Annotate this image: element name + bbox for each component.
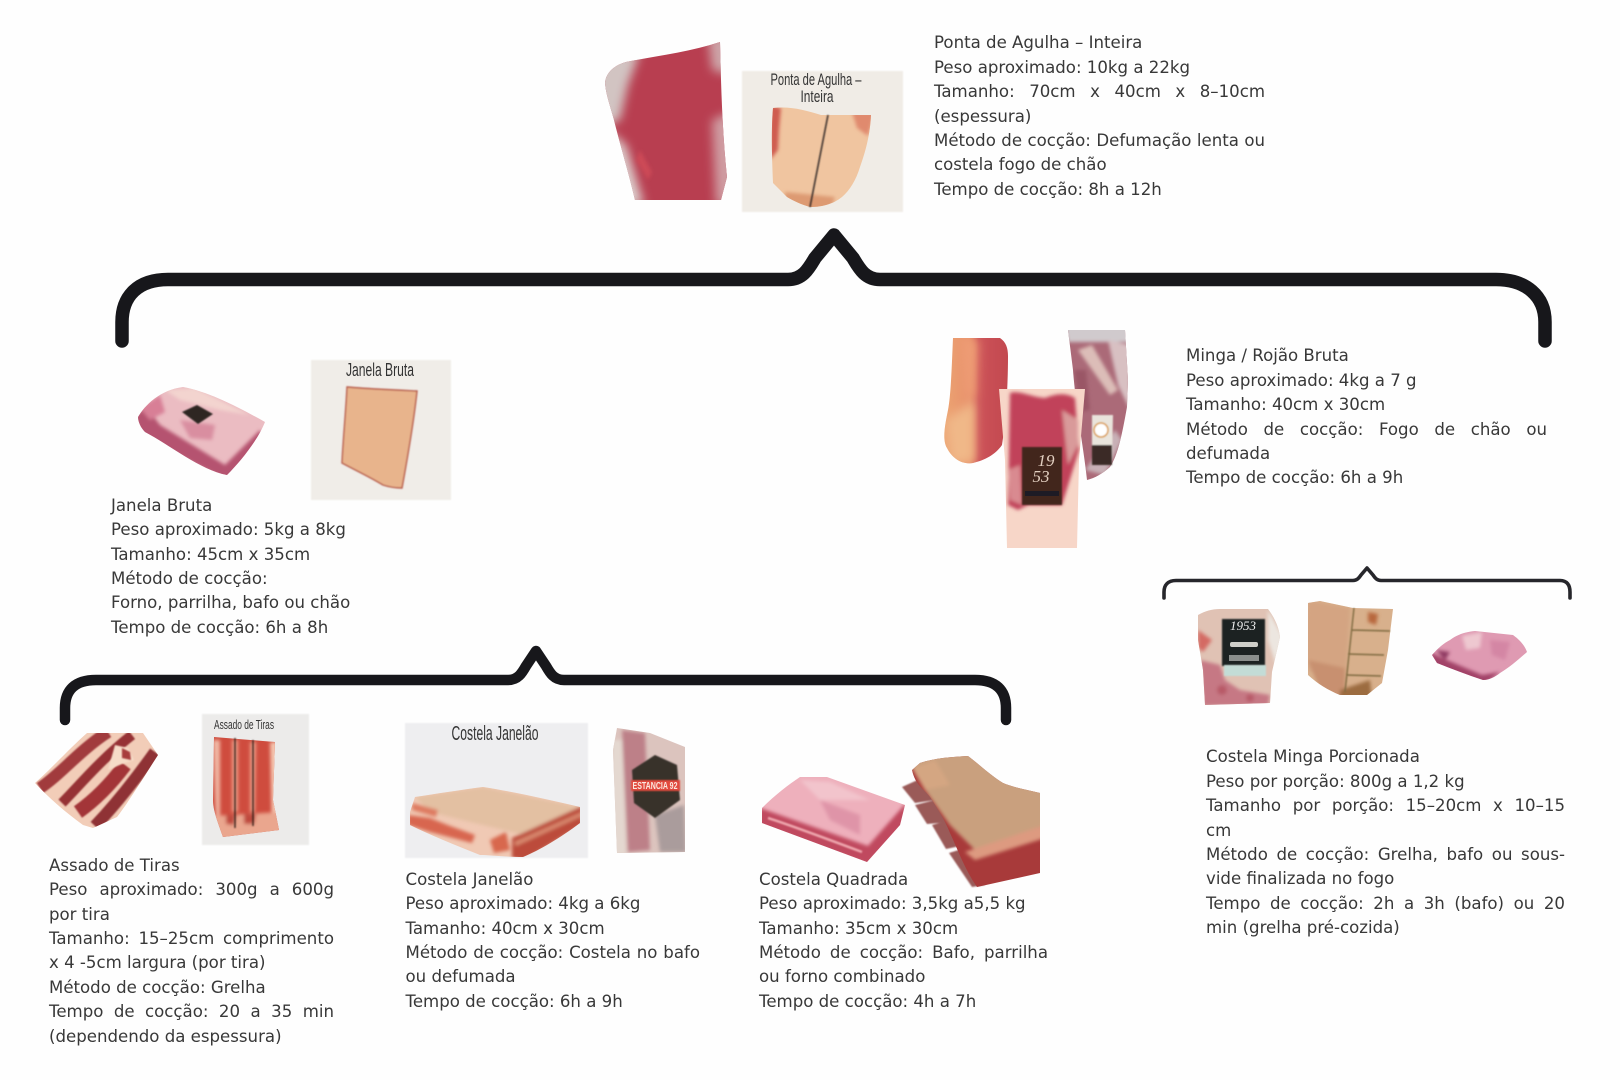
panel: Janela Bruta xyxy=(110,360,451,637)
text: Janela Bruta details: Peso aproximado: 5kg a 8kg xyxy=(111,520,346,539)
image: Costela Janelão Estancia 92 pack xyxy=(613,728,685,853)
text: Costela Minga Porcionada details: Tamanho por porção: 15–20cm x 10–15 xyxy=(1206,796,1565,815)
text: Costela Minga Porcionada details: Costela Minga Porcionada xyxy=(1206,747,1420,766)
image: Costela Quadrada bone-side cut xyxy=(902,750,1045,890)
text: Costela Janelão details: Tamanho: 40cm x 30cm xyxy=(406,919,605,938)
text: Costela Quadrada details: Tamanho: 35cm x 30cm xyxy=(759,919,958,938)
text: Minga / Rojão details: Minga / Rojão Bruta xyxy=(1186,346,1349,365)
text: Costela Janelão details: Peso aproximado: 4kg a 6kg xyxy=(406,894,640,913)
text: Minga / Rojão details xyxy=(1186,346,1547,487)
text: Costela Quadrada details: Método de cocção: Bafo, parrilha xyxy=(759,943,1048,962)
image: Minga vacuum pack with Chef label xyxy=(1068,330,1128,480)
text: Minga / Rojão details: defumada xyxy=(1186,444,1270,463)
text: Ponta de Agulha details: costela fogo de chão xyxy=(934,155,1107,174)
bracket: Minga children xyxy=(1162,566,1572,600)
text: Assado de Tiras details: Tempo de cocção: 20 a 35 min xyxy=(49,1002,334,1021)
image: 1953 portion pack xyxy=(1198,609,1280,705)
text: Costela Minga Porcionada details: Tempo de cocção: 2h a 3h (bafo) ou 20 xyxy=(1206,894,1565,913)
text: Costela Quadrada details: Tempo de cocção: 4h a 7h xyxy=(759,992,976,1011)
image: Janela Bruta labelled card xyxy=(311,360,451,500)
text: Janela Bruta details xyxy=(110,496,350,637)
image: Assado de Tiras raw cut xyxy=(35,733,158,828)
text: Minga / Rojão details: Tamanho: 40cm x 30cm xyxy=(1186,395,1385,414)
text: Assado de Tiras details: Assado de Tiras xyxy=(49,856,180,875)
text: Costela Minga Porcionada details: Peso por porção: 800g a 1,2 kg xyxy=(1206,772,1465,791)
text: Assado de Tiras details: por tira xyxy=(49,905,110,924)
image: Costela Quadrada raw pink cut xyxy=(762,777,905,862)
card title: Assado de Tiras xyxy=(214,717,274,732)
panel: Ponta de Agulha Inteira xyxy=(605,33,1265,212)
panel: Costela Minga Porcionada xyxy=(1198,601,1565,937)
text: Janela Bruta details: Janela Bruta xyxy=(111,496,212,515)
text: Costela Minga Porcionada details xyxy=(1206,747,1565,937)
image: Assado de Tiras labelled card xyxy=(202,714,309,845)
text: Janela Bruta details: Tamanho: 45cm x 35cm xyxy=(111,545,310,564)
rib slab drawing xyxy=(410,787,580,857)
text: Costela Quadrada details: ou forno combinado xyxy=(759,967,925,986)
text: Ponta de Agulha details: Método de cocção: Defumação lenta ou xyxy=(934,131,1265,150)
text: Costela Janelão details: ou defumada xyxy=(406,967,516,986)
text: Ponta de Agulha details: Tamanho: 70cm x 40cm x 8–10cm xyxy=(934,82,1265,101)
image: Ponta de Agulha labelled card xyxy=(742,70,903,212)
text: Costela Janelão details xyxy=(405,870,700,1011)
text: Ponta de Agulha details: (espessura) xyxy=(934,107,1031,126)
text: Assado de Tiras details: (dependendo da espessura) xyxy=(49,1027,282,1046)
text: Assado de Tiras details: x 4 -5cm largura (por tira) xyxy=(49,953,266,972)
card title: Janela Bruta xyxy=(346,360,415,380)
fat cap drawing xyxy=(342,387,417,488)
text: Ponta de Agulha details: Peso aproximado: 10kg a 22kg xyxy=(934,58,1190,77)
text: Costela Minga Porcionada details: cm xyxy=(1206,821,1231,840)
text: Costela Minga Porcionada details: vide finalizada no fogo xyxy=(1206,869,1394,888)
panel: Minga / Rojão Bruta xyxy=(944,330,1547,548)
text: Costela Janelão details: Tempo de cocção: 6h a 9h xyxy=(406,992,623,1011)
panel: Assado de Tiras xyxy=(35,714,334,1046)
text: Costela Quadrada details: Costela Quadrada xyxy=(759,870,908,889)
image: Minga raw cut xyxy=(944,338,1008,464)
image: portion fat cap with grid lines xyxy=(1308,601,1393,695)
text: Minga / Rojão details: Tempo de cocção: 6h a 9h xyxy=(1186,468,1403,487)
text: Costela Quadrada details: Peso aproximado: 3,5kg a5,5 kg xyxy=(759,894,1026,913)
text: Costela Janelão details: Costela Janelão xyxy=(406,870,533,889)
bracket: Janela Bruta children xyxy=(60,646,1012,726)
bracket: top level xyxy=(115,228,1552,348)
image: Minga 1953 pack xyxy=(999,389,1085,548)
panel: Costela Janelão xyxy=(405,723,700,1011)
image: Minga 1953 pack: 53 xyxy=(1032,467,1050,486)
text: Ponta de Agulha details: Tempo de cocção: 8h a 12h xyxy=(934,180,1162,199)
text: Costela Janelão details: Método de cocção: Costela no bafo xyxy=(406,943,700,962)
text: Ponta de Agulha details xyxy=(934,33,1265,199)
text: Minga / Rojão details: Peso aproximado: 4kg a 7 g xyxy=(1186,371,1417,390)
text: Assado de Tiras details: Peso aproximado: 300g a 600g xyxy=(49,880,334,899)
text: Costela Minga Porcionada details: min (grelha pré-cozida) xyxy=(1206,918,1400,937)
text: Janela Bruta details: Método de cocção: xyxy=(111,569,268,588)
image: Ponta de Agulha labelled card: Inteira xyxy=(800,87,834,106)
image: Ponta de Agulha raw cut xyxy=(605,42,727,200)
card title: Costela Janelão xyxy=(452,723,538,745)
text: Assado de Tiras details: Método de cocção: Grelha xyxy=(49,978,266,997)
text: Costela Minga Porcionada details: Método de cocção: Grelha, bafo ou sous- xyxy=(1206,845,1565,864)
fat cap drawing xyxy=(772,108,871,207)
ribs strip drawing xyxy=(213,737,279,837)
image: Costela Janelão Estancia 92 pack: ESTANCIA 92 xyxy=(632,781,678,792)
text: Janela Bruta details: Tempo de cocção: 6h a 8h xyxy=(111,618,328,637)
card title: Ponta de Agulha – xyxy=(770,70,862,89)
text: Assado de Tiras details: Tamanho: 15–25cm comprimento xyxy=(49,929,334,948)
text: Minga / Rojão details: Método de cocção: Fogo de chão ou xyxy=(1186,420,1547,439)
image: 1953 portion pack: 1953 xyxy=(1230,618,1256,633)
text: Janela Bruta details: Forno, parrilha, bafo ou chão xyxy=(111,593,350,612)
text: Assado de Tiras details xyxy=(48,856,334,1046)
text: Ponta de Agulha details: Ponta de Agulha – Inteira xyxy=(934,33,1142,52)
text: Costela Quadrada details xyxy=(758,870,1048,1011)
image: Costela Janelão labelled card xyxy=(405,723,588,860)
image: Janela Bruta vacuum pack xyxy=(138,387,265,475)
panel: Costela Quadrada xyxy=(758,756,1048,1011)
image: Minga 1953 pack: 19 xyxy=(1038,451,1055,470)
image: portion raw cut xyxy=(1432,631,1527,680)
